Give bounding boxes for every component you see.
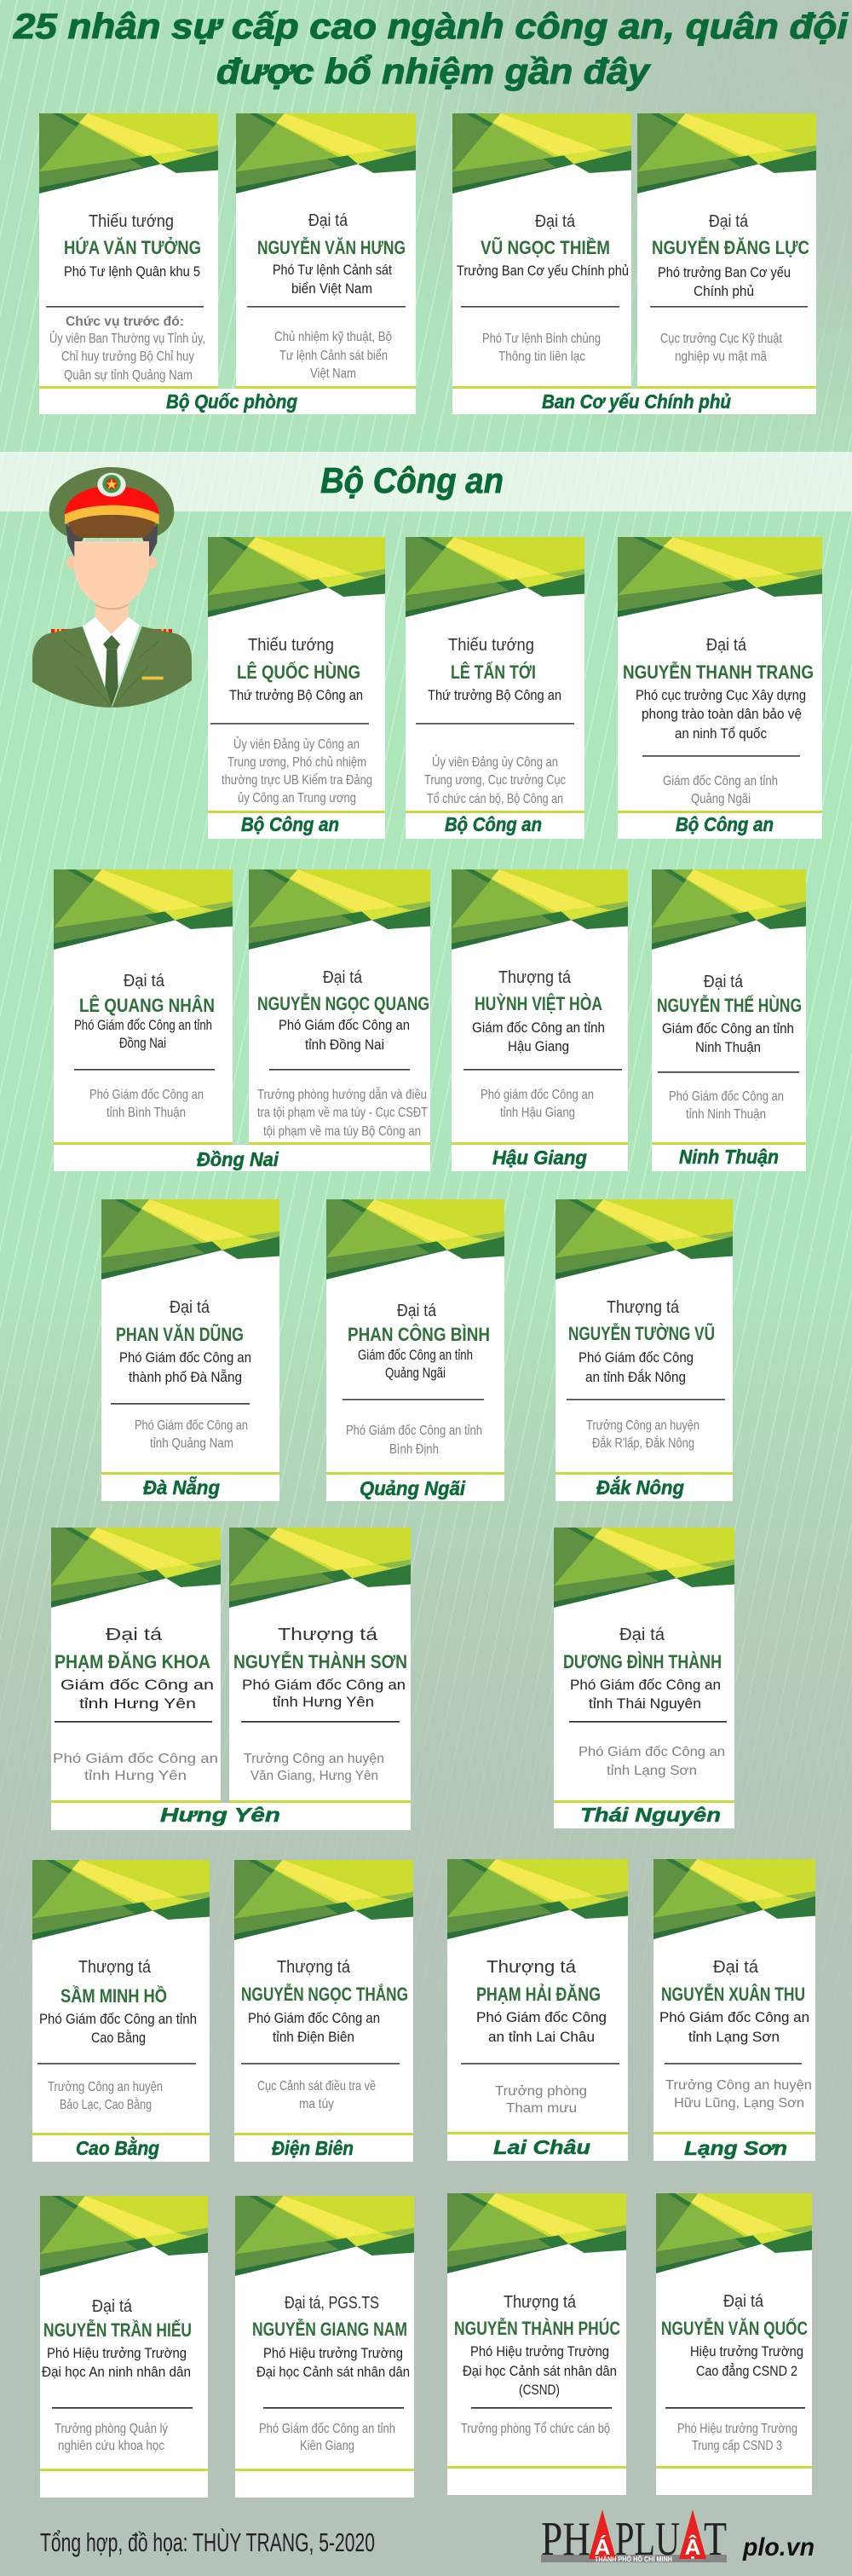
card: Nguyễn Văn Quốc: NGUYỄN VĂN QUỐC <box>661 2317 808 2339</box>
title: được bổ nhiệm gần đây <box>216 51 652 91</box>
card: Nguyễn Văn Quốc: Đại tá <box>723 2292 764 2311</box>
card: Phạm Đăng Khoa: tỉnh Hưng Yên <box>79 1695 196 1712</box>
card: Nguyễn Thành Sơn: NGUYỄN THÀNH SƠN <box>233 1650 407 1672</box>
card: Nguyễn Trần Hiếu: Đại học An ninh nhân dân <box>42 2364 191 2380</box>
icon: police officer avatar <box>32 467 192 708</box>
location label: Bộ Quốc phòng <box>39 389 416 414</box>
card: Nguyễn Văn Quốc <box>656 2193 812 2495</box>
card: Hứa Văn Tưởng: Ủy viên Ban Thường vụ Tỉnh ủy, <box>49 330 205 346</box>
card: Nguyễn Thanh Trang: an ninh Tổ quốc <box>675 725 767 742</box>
card: Nguyễn Xuân Thu: Hữu Lũng, Lạng Sơn <box>674 2096 804 2111</box>
card: Nguyễn Thế Hùng: tỉnh Ninh Thuận <box>686 1107 766 1122</box>
card: Huỳnh Việt Hòa <box>452 869 628 1171</box>
card: Nguyễn Văn Hưng: Phó Tư lệnh Cảnh sát <box>273 262 392 278</box>
card: Sầm Minh Hồ: Phó Giám đốc Công an tỉnh <box>39 2011 197 2027</box>
card: Nguyễn Thành Sơn: Văn Giang, Hưng Yên <box>250 1769 378 1783</box>
card: Nguyễn Giang Nam: Phó Hiệu trưởng Trường <box>263 2345 403 2361</box>
card: Phan Công Bình: Đại tá <box>397 1302 437 1320</box>
card: Nguyễn Trần Hiếu: Đại tá <box>92 2297 133 2316</box>
card: Hứa Văn Tưởng: Thiếu tướng <box>89 212 174 231</box>
card: Nguyễn Văn Hưng: Chủ nhiệm kỹ thuật, Bộ <box>274 330 392 344</box>
panel: Đồng Nai group <box>54 869 430 1171</box>
footer credit: Tổng hợp, đồ họa: THÙY TRANG, 5-2020 <box>40 2527 375 2557</box>
card: Lê Quốc Hùng: LÊ QUỐC HÙNG <box>237 661 360 683</box>
location label: Cao Bằng <box>76 2136 159 2159</box>
card: Phan Công Bình: PHAN CÔNG BÌNH <box>348 1324 490 1345</box>
card: Nguyễn Tường Vũ: Phó Giám đốc Công <box>579 1349 694 1366</box>
card: Nguyễn Đăng Lực: Phó trưởng Ban Cơ yếu <box>658 264 791 280</box>
card: Phan Công Bình <box>326 1199 504 1501</box>
card: Nguyễn Đăng Lực: NGUYỄN ĐĂNG LỰC <box>652 236 809 258</box>
card: Nguyễn Văn Hưng <box>236 113 416 389</box>
card: Nguyễn Ngọc Thắng: Phó Giám đốc Công an <box>248 2010 380 2026</box>
card: Phạm Hải Đăng: Phó Giám đốc Công <box>476 2009 607 2025</box>
card: Nguyễn Thanh Trang: Giám đốc Công an tỉnh <box>663 774 778 788</box>
card: Huỳnh Việt Hòa: tỉnh Hậu Giang <box>500 1106 575 1120</box>
card: Phạm Hải Đăng: Tham mưu <box>506 2101 577 2116</box>
card: Sầm Minh Hồ: Cao Bằng <box>91 2030 146 2046</box>
card: Nguyễn Ngọc Quang: Phó Giám đốc Công an <box>279 1017 410 1033</box>
card: Dương Đình Thành: Đại tá <box>619 1626 665 1644</box>
card: Phạm Hải Đăng: an tỉnh Lai Châu <box>488 2029 595 2045</box>
card: Phạm Đăng Khoa: tỉnh Hưng Yên <box>84 1769 187 1783</box>
location label: Đắk Nông <box>596 1476 684 1499</box>
card: Nguyễn Ngọc Thắng: NGUYỄN NGỌC THẮNG <box>241 1983 408 2005</box>
card: Lê Quốc Hùng: Thứ trưởng Bộ Công an <box>229 687 363 703</box>
card: Nguyễn Văn Quốc: Phó Hiệu trưởng Trường <box>677 2422 797 2436</box>
section heading band: Bộ Công an: Bộ Công an <box>320 460 504 500</box>
card: Phạm Hải Đăng <box>447 1859 628 2161</box>
card: Nguyễn Tường Vũ: Trưởng Công an huyện <box>586 1418 699 1433</box>
card: Sầm Minh Hồ <box>32 1860 210 2162</box>
location label: Đồng Nai <box>54 1145 430 1171</box>
card: Huỳnh Việt Hòa: Thượng tá <box>498 968 572 987</box>
card: Phạm Hải Đăng: PHẠM HẢI ĐĂNG <box>476 1984 601 2005</box>
card: Lê Tấn Tới: Thiếu tướng <box>448 636 534 655</box>
card: Nguyễn Tường Vũ: NGUYỄN TƯỜNG VŨ <box>568 1322 715 1344</box>
card: Huỳnh Việt Hòa: Hậu Giang <box>508 1038 569 1054</box>
card: Lê Quang Nhân: tỉnh Bình Thuận <box>106 1106 186 1120</box>
card: Vũ Ngọc Thiềm: Trưởng Ban Cơ yếu Chính phủ <box>457 263 629 279</box>
card: Huỳnh Việt Hòa: Giám đốc Công an tỉnh <box>472 1019 605 1036</box>
card: Sầm Minh Hồ: Bảo Lạc, Cao Bằng <box>60 2096 152 2112</box>
card: Sầm Minh Hồ: Trưởng Công an huyện <box>48 2080 163 2094</box>
card: Phạm Đăng Khoa: Phó Giám đốc Công an <box>53 1752 218 1766</box>
card: Nguyễn Thành Sơn: tỉnh Hưng Yên <box>273 1694 374 1710</box>
card: Nguyễn Ngọc Thắng: ma túy <box>299 2097 334 2111</box>
card: Nguyễn Đăng Lực: Chính phủ <box>694 283 754 299</box>
panel: Ban Cơ yếu Chính phủ group <box>452 113 816 414</box>
card: Nguyễn Tường Vũ: an tỉnh Đắk Nông <box>585 1369 686 1385</box>
card: Lê Tấn Tới <box>406 537 584 839</box>
title: 25 nhân sự cấp cao ngành công an, quân đội <box>13 6 849 46</box>
location label: Ban Cơ yếu Chính phủ: Ban Cơ yếu Chính phủ <box>542 390 731 413</box>
card: Nguyễn Ngọc Quang: Trưởng phòng hướng dẫn và điều <box>257 1086 427 1102</box>
card: Lê Quang Nhân: Đồng Nai <box>119 1035 166 1051</box>
card: Hứa Văn Tưởng: Quân sự tỉnh Quảng Nam <box>64 368 193 383</box>
location label: Hưng Yên <box>51 1803 411 1830</box>
card: Nguyễn Ngọc Quang <box>249 869 430 1145</box>
card: Dương Đình Thành: DƯƠNG ĐÌNH THÀNH <box>563 1651 722 1672</box>
panel: Hưng Yên group <box>51 1528 411 1830</box>
card: Nguyễn Thanh Trang: NGUYỄN THANH TRANG <box>623 661 814 683</box>
card: Nguyễn Văn Hưng: Việt Nam <box>310 367 356 381</box>
card: Vũ Ngọc Thiềm: VŨ NGỌC THIỀM <box>481 237 610 258</box>
card: Nguyễn Xuân Thu: tỉnh Lạng Sơn <box>688 2029 780 2045</box>
card: Lê Quốc Hùng: Thiếu tướng <box>248 636 334 655</box>
card: Nguyễn Thế Hùng: Phó Giám đốc Công an <box>669 1089 784 1104</box>
location label: Điện Biên <box>272 2137 354 2159</box>
card: Nguyễn Đăng Lực <box>637 113 816 389</box>
card: Nguyễn Ngọc Quang: tội phạm về ma túy Bộ Công an <box>263 1124 421 1139</box>
card: Nguyễn Thành Phúc: NGUYỄN THÀNH PHÚC <box>454 2317 620 2339</box>
card: Nguyễn Thanh Trang: Phó cục trưởng Cục Xây dựng <box>636 687 806 703</box>
card: Nguyễn Xuân Thu: Đại tá <box>713 1958 759 1977</box>
card: Vũ Ngọc Thiềm: Thông tin liên lạc <box>498 349 585 364</box>
card: Nguyễn Văn Quốc: Cao đẳng CSND 2 <box>696 2363 797 2379</box>
card: Lê Quang Nhân <box>54 869 233 1145</box>
card: Sầm Minh Hồ: SẦM MINH HỒ <box>60 1985 167 2007</box>
card: Lê Quang Nhân: LÊ QUANG NHÂN <box>79 995 215 1016</box>
card: Vũ Ngọc Thiềm: Đại tá <box>535 212 576 231</box>
card: Lê Quốc Hùng: ủy Công an Trung ương <box>238 791 356 806</box>
card: Phạm Đăng Khoa: PHẠM ĐĂNG KHOA <box>55 1651 210 1672</box>
card: Nguyễn Thanh Trang: Đại tá <box>706 636 747 655</box>
location label: Lai Châu <box>493 2136 590 2158</box>
location label: Bộ Quốc phòng: Bộ Quốc phòng <box>166 390 297 413</box>
location label: Bộ Công an <box>445 813 542 835</box>
card: Lê Tấn Tới: Thứ trưởng Bộ Công an <box>428 687 561 703</box>
card: Nguyễn Thành Sơn <box>229 1528 411 1803</box>
card: Vũ Ngọc Thiềm <box>452 113 631 389</box>
card: Nguyễn Văn Hưng: Tư lệnh Cảnh sát biển <box>279 348 388 363</box>
location label: Đồng Nai: Đồng Nai <box>197 1148 279 1170</box>
card: Nguyễn Thành Phúc: Thượng tá <box>504 2293 577 2312</box>
card: Sầm Minh Hồ: Thượng tá <box>78 1958 152 1977</box>
card: Nguyễn Thành Sơn: Trưởng Công an huyện <box>244 1752 384 1766</box>
location label: Ninh Thuận <box>679 1146 779 1168</box>
card: Phan Văn Dũng: Phó Giám đốc Công an <box>135 1418 248 1433</box>
card: Nguyễn Đăng Lực: Cục trưởng Cục Kỹ thuật <box>660 332 782 346</box>
card: Nguyễn Văn Hưng: Đại tá <box>308 211 348 230</box>
card: Lê Quốc Hùng <box>208 537 385 839</box>
card: Nguyễn Giang Nam <box>235 2196 414 2498</box>
card: Lê Tấn Tới: Tổ chức cán bộ, Bộ Công an <box>427 791 563 806</box>
location label: Quảng Ngãi <box>360 1477 466 1499</box>
card: Phan Công Bình: Bình Định <box>389 1442 439 1457</box>
section heading band: Bộ Công an <box>0 452 852 511</box>
card: Phan Văn Dũng: PHAN VĂN DŨNG <box>116 1324 244 1345</box>
card: Dương Đình Thành: tỉnh Thái Nguyên <box>589 1695 701 1712</box>
card: Nguyễn Trần Hiếu <box>40 2196 208 2498</box>
logo: plo.vn: plo.vn <box>742 2533 815 2562</box>
card: Phan Văn Dũng: Đại tá <box>170 1298 210 1317</box>
location label: Bộ Công an <box>241 813 339 835</box>
card: Phạm Đăng Khoa: Giám đốc Công an <box>60 1677 214 1693</box>
card: Nguyễn Ngọc Quang: tra tội phạm về ma túy - Cục CSĐT <box>257 1106 428 1120</box>
card: Nguyễn Tường Vũ: Thượng tá <box>607 1298 680 1317</box>
card: Nguyễn Tường Vũ <box>556 1199 733 1501</box>
card: Nguyễn Trần Hiếu: Trưởng phòng Quản lý <box>55 2422 168 2436</box>
card: Nguyễn Xuân Thu: Phó Giám đốc Công an <box>659 2009 809 2025</box>
card: Nguyễn Xuân Thu <box>653 1859 815 2161</box>
card: Nguyễn Ngọc Quang: NGUYỄN NGỌC QUANG <box>257 992 429 1014</box>
card: Nguyễn Thành Sơn: Thượng tá <box>278 1626 378 1644</box>
card: Nguyễn Thế Hùng: Ninh Thuận <box>695 1039 761 1055</box>
card: Phan Văn Dũng <box>101 1199 279 1501</box>
card: Nguyễn Thành Phúc: Đại học Cảnh sát nhân dân <box>463 2363 617 2379</box>
location label: Hậu Giang <box>492 1146 587 1169</box>
card: Lê Quốc Hùng: Trung ương, Phó chủ nhiệm <box>227 755 366 770</box>
card: Phan Công Bình: Phó Giám đốc Công an tỉnh <box>346 1424 482 1438</box>
logo: Pháp Luật: PLU <box>615 2513 680 2566</box>
logo: Pháp Luật <box>541 2510 727 2566</box>
card: Nguyễn Văn Hưng: NGUYỄN VĂN HƯNG <box>257 236 406 258</box>
card: Hứa Văn Tưởng: HỨA VĂN TƯỞNG <box>64 237 201 258</box>
card: Nguyễn Văn Quốc: Trung cấp CSND 3 <box>692 2439 782 2453</box>
card: Lê Tấn Tới: Trung ương, Cục trưởng Cục <box>424 773 566 788</box>
location label: Đà Nẵng <box>143 1476 220 1499</box>
logo: Pháp Luật: Á <box>595 2534 611 2560</box>
card: Dương Đình Thành: Phó Giám đốc Công an <box>579 1745 725 1759</box>
card: Nguyễn Đăng Lực: Đại tá <box>709 212 749 231</box>
card: Nguyễn Văn Quốc: Hiệu trưởng Trường <box>690 2343 803 2359</box>
card: Nguyễn Trần Hiếu: NGUYỄN TRẦN HIẾU <box>43 2319 192 2341</box>
logo: Pháp Luật: THÀNH PHỐ HỒ CHÍ MINH <box>595 2555 672 2563</box>
logo: Pháp Luật: PH <box>541 2513 590 2566</box>
panel: Bộ Quốc phòng group <box>39 113 416 414</box>
location label: Lạng Sơn <box>684 2137 787 2159</box>
card: Nguyễn Xuân Thu: Trưởng Công an huyện <box>665 2078 812 2093</box>
card: Nguyễn Giang Nam: NGUYỄN GIANG NAM <box>252 2318 407 2340</box>
location label: Thái Nguyên <box>580 1804 721 1826</box>
card: Nguyễn Xuân Thu: NGUYỄN XUÂN THU <box>661 1983 805 2005</box>
card: Lê Quang Nhân: Phó Giám đốc Công an tỉnh <box>74 1017 212 1033</box>
card: Lê Quốc Hùng: thường trực UB Kiểm tra Đảng <box>222 772 372 788</box>
card: Hứa Văn Tưởng: Chỉ huy trưởng Bộ Chỉ huy <box>61 349 194 364</box>
card: Nguyễn Thanh Trang <box>618 537 822 839</box>
card: Hứa Văn Tưởng: Phó Tư lệnh Quân khu 5 <box>64 263 200 280</box>
card: Nguyễn Thành Phúc: Trưởng phòng Tổ chức cán bộ <box>461 2421 610 2436</box>
card: Nguyễn Ngọc Thắng: Thượng tá <box>277 1958 351 1977</box>
card: Huỳnh Việt Hòa: HUỲNH VIỆT HÒA <box>475 993 602 1014</box>
card: Phan Văn Dũng: thành phố Đà Nẵng <box>129 1369 242 1385</box>
card: Nguyễn Ngọc Thắng <box>234 1860 413 2162</box>
card: Nguyễn Đăng Lực: nghiệp vụ mật mã <box>675 349 767 364</box>
card: Nguyễn Thành Phúc: Phó Hiệu trưởng Trường <box>470 2343 609 2359</box>
card: Phan Văn Dũng: tỉnh Quảng Nam <box>150 1436 233 1451</box>
card: Dương Đình Thành <box>554 1528 734 1828</box>
card: Dương Đình Thành: Phó Giám đốc Công an <box>570 1677 721 1693</box>
card: Nguyễn Giang Nam: Đại học Cảnh sát nhân dân <box>256 2364 410 2380</box>
card: Lê Quốc Hùng: Ủy viên Đảng ủy Công an <box>233 736 360 752</box>
card: Nguyễn Thế Hùng: Giám đốc Công an tỉnh <box>662 1020 794 1037</box>
card: Nguyễn Thế Hùng: Đại tá <box>704 973 744 991</box>
card: Nguyễn Ngọc Quang: Đại tá <box>323 968 363 987</box>
card: Phạm Đăng Khoa: Đại tá <box>106 1626 163 1644</box>
title <box>13 6 849 91</box>
card: Lê Tấn Tới: Ủy viên Đảng ủy Công an <box>432 754 558 770</box>
card: Nguyễn Giang Nam: Đại tá, PGS.TS <box>285 2294 379 2313</box>
card: Dương Đình Thành: tỉnh Lạng Sơn <box>607 1764 697 1778</box>
card: Hứa Văn Tưởng <box>39 113 218 389</box>
card: Nguyễn Thanh Trang: phong trào toàn dân bảo vệ <box>642 706 802 722</box>
card: Phạm Hải Đăng: Thượng tá <box>486 1958 577 1977</box>
card: Nguyễn Ngọc Thắng: tỉnh Điện Biên <box>273 2029 354 2045</box>
card: Hứa Văn Tưởng: Chức vụ trước đó: <box>66 315 184 329</box>
card: Nguyễn Trần Hiếu: Phó Hiệu trưởng Trường <box>47 2345 187 2361</box>
card: Vũ Ngọc Thiềm: Phó Tư lệnh Binh chủng <box>482 332 601 346</box>
card: Nguyễn Tường Vũ: Đắk R'lấp, Đắk Nông <box>592 1435 694 1451</box>
card: Nguyễn Giang Nam: Phó Giám đốc Công an tỉnh <box>259 2422 395 2436</box>
card: Nguyễn Thế Hùng: NGUYỄN THẾ HÙNG <box>657 994 802 1016</box>
card: Nguyễn Giang Nam: Kiên Giang <box>300 2439 354 2453</box>
card: Nguyễn Văn Hưng: biển Việt Nam <box>291 280 372 297</box>
card: Lê Quang Nhân: Phó Giám đốc Công an <box>89 1088 204 1102</box>
card: Nguyễn Thế Hùng <box>652 869 806 1171</box>
card: Lê Quang Nhân: Đại tá <box>124 972 165 991</box>
card: Phan Văn Dũng: Phó Giám đốc Công an <box>119 1349 251 1366</box>
card: Phan Công Bình: Giám đốc Công an tỉnh <box>358 1347 473 1363</box>
card: Phạm Hải Đăng: Trưởng phòng <box>495 2084 587 2099</box>
logo: Pháp Luật: T <box>704 2513 727 2566</box>
card: Nguyễn Trần Hiếu: nghiên cứu khoa học <box>58 2439 164 2453</box>
card: Nguyễn Thành Sơn: Phó Giám đốc Công an <box>242 1677 406 1693</box>
card: Nguyễn Ngọc Quang: tỉnh Đồng Nai <box>305 1037 384 1053</box>
card: Phan Công Bình: Quảng Ngãi <box>385 1365 446 1381</box>
location label: Hưng Yên: Hưng Yên <box>160 1804 280 1826</box>
card: Nguyễn Thành Phúc: (CSND) <box>519 2382 560 2398</box>
card: Huỳnh Việt Hòa: Phó giám đốc Công an <box>481 1088 594 1102</box>
location label: Ban Cơ yếu Chính phủ <box>452 389 816 414</box>
card: Nguyễn Thanh Trang: Quảng Ngãi <box>691 792 751 806</box>
card: Nguyễn Ngọc Thắng: Cục Cảnh sát điều tra về <box>257 2079 376 2094</box>
logo: Pháp Luật: Ậ <box>685 2534 701 2560</box>
card: Nguyễn Thành Phúc <box>447 2193 626 2495</box>
card: Phạm Đăng Khoa <box>51 1528 221 1803</box>
location label: Bộ Công an <box>676 813 774 835</box>
card: Lê Tấn Tới: LÊ TẤN TỚI <box>451 661 536 683</box>
